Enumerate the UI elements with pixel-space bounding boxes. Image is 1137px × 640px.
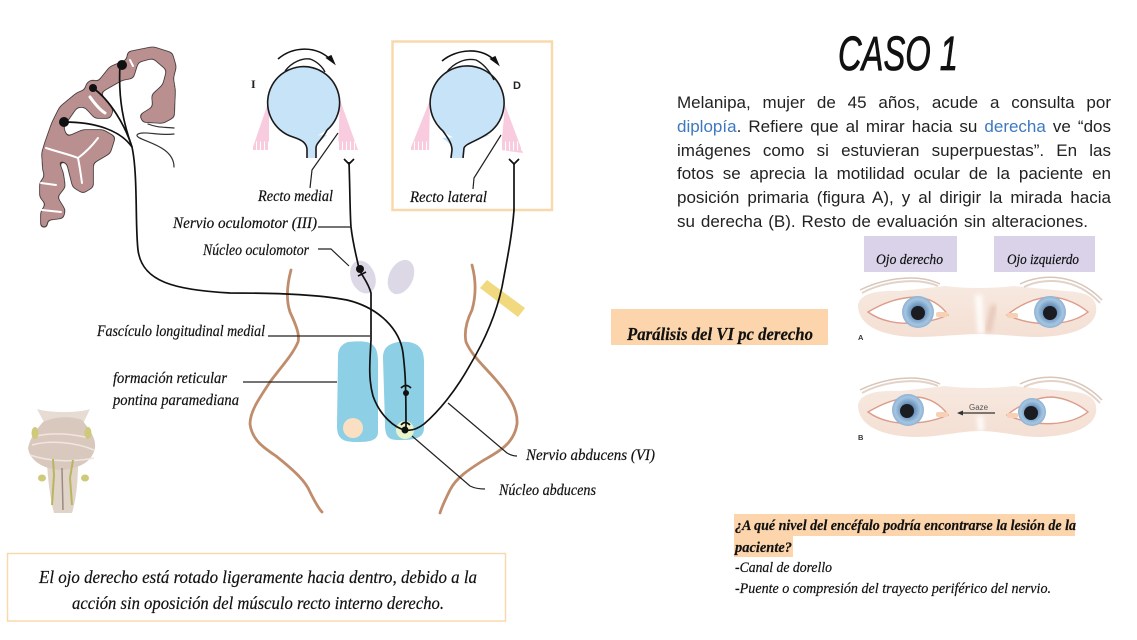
callout: right eye explanation: El ojo derecho está rotado ligeramente hacia dentro, debido a la [38, 567, 477, 587]
midbrain oculomotor nuclei [346, 256, 419, 298]
case description [677, 93, 1111, 231]
yellow decussation marker [480, 280, 525, 317]
brainstem outline [250, 265, 517, 513]
cerebral cortex [40, 47, 176, 227]
photo B: gaze to the right: Gaze [969, 403, 989, 412]
label: Núcleo abducens: Núcleo abducens [498, 482, 596, 499]
case description: Melanipa, mujer de 45 años, acude a consulta por [677, 93, 1111, 112]
cortical fibres [64, 65, 406, 430]
callout: right eye explanation [8, 554, 506, 621]
arrow: right eye rotation [442, 51, 498, 64]
pontine columns [337, 341, 424, 442]
label: formación reticular pontina paramediana [112, 370, 239, 409]
right eye [410, 60, 523, 158]
left eye [252, 59, 358, 158]
label: formación reticular pontina paramediana: pontina paramediana [112, 392, 239, 409]
neuron bodies [356, 265, 409, 434]
case description: posición primaria (figura A), y al dirigir la mirada hacia [677, 188, 1111, 207]
label box: Ojo derecho: Ojo derecho [876, 252, 943, 268]
label: I: I [251, 77, 256, 91]
question and answers: -Canal de dorello [735, 560, 832, 576]
label: Nervio oculomotor: Nervio oculomotor (III) [172, 215, 317, 232]
photo B: gaze to the right: B [858, 433, 864, 442]
label: Nervio abducens: Nervio abducens (VI) [525, 447, 655, 464]
question and answers: -Puente o compresión del trayecto periférico del nervio. [735, 581, 1051, 597]
nerve pathways [344, 159, 519, 430]
photo A: primary gaze [858, 277, 1102, 342]
case description: imágenes como si estuvieran superpuestas”. En las [677, 141, 1111, 160]
case description: su derecha (B). Resto de evaluación sin alteraciones. [677, 212, 1088, 231]
cortical neuron bodies [59, 60, 127, 127]
arrow: left eye rotation [278, 49, 334, 63]
highlighted box: right eye [392, 42, 552, 210]
label: Núcleo oculomotor: Núcleo oculomotor [202, 242, 310, 259]
label box: Ojo izquierdo [994, 236, 1095, 272]
label box: Ojo izquierdo: Ojo izquierdo [1007, 252, 1079, 268]
diagnosis tag [611, 309, 828, 345]
question and answers: ¿A qué nivel del encéfalo podría encontrarse la lesión de la [735, 518, 1076, 534]
question and answers [733, 514, 1076, 597]
label: formación reticular pontina paramediana: formación reticular [113, 370, 228, 387]
question and answers: paciente? [733, 540, 792, 556]
label: Recto medial: Recto medial [257, 188, 333, 205]
label box: Ojo derecho [864, 236, 957, 272]
icon: brainstem anatomy [28, 409, 95, 513]
diagnosis tag: Parálisis del VI pc derecho [626, 324, 813, 344]
photo B: gaze to the right [858, 377, 1102, 442]
leader lines [243, 133, 517, 489]
case description: diplopía. Refiere que al mirar hacia su derecha ve “dos [677, 117, 1111, 136]
callout: right eye explanation: acción sin oposición del músculo recto interno derecho. [72, 593, 444, 613]
title: CASO 1 [838, 28, 958, 81]
photo A: primary gaze: A [858, 333, 864, 342]
label: D: D [513, 80, 521, 92]
label: Recto lateral: Recto lateral [409, 189, 488, 206]
label: Fascículo longitudinal medial: Fascículo longitudinal medial [96, 323, 265, 340]
case description: fotos se aprecia la motilidad ocular de la paciente en [677, 164, 1111, 183]
